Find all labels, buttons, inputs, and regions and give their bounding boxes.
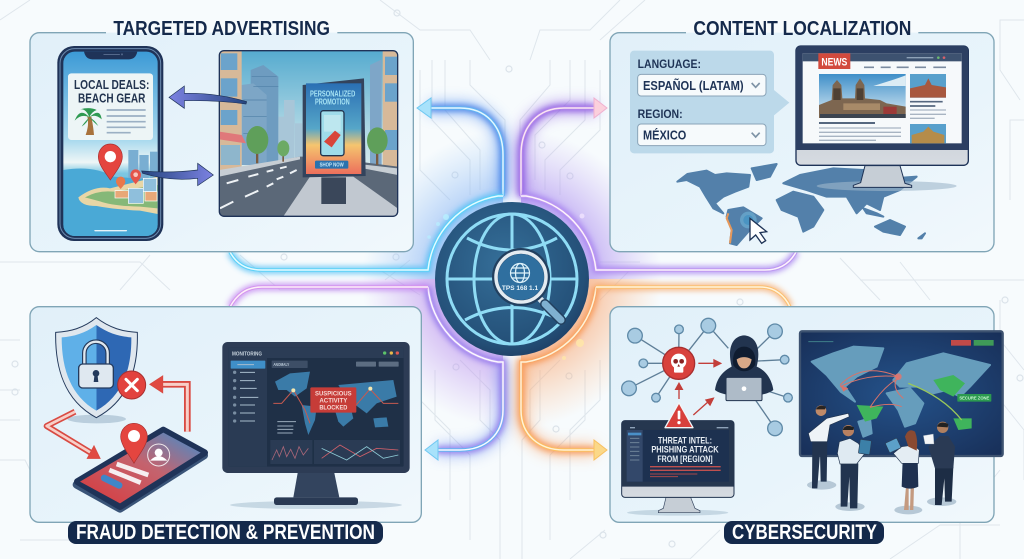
quadrant glow: lower left	[228, 279, 503, 500]
red arrow: phone to shield	[150, 376, 187, 432]
alert box	[310, 387, 356, 413]
quadrant glow: upper left	[228, 60, 503, 279]
heading: TARGETED ADVERTISING	[113, 17, 330, 40]
city on map	[128, 150, 158, 182]
tilted phone	[77, 423, 205, 509]
panel: targeted advertising	[30, 17, 413, 252]
arrow: center to fraud detection (purple to blue)	[230, 287, 503, 460]
billboard	[303, 78, 366, 177]
monitoring dashboard monitor: MONITORING	[232, 351, 262, 357]
blocked icon	[118, 371, 146, 399]
palm	[75, 108, 102, 135]
news photo cathedral	[819, 74, 906, 118]
central globe with magnifier	[427, 202, 589, 360]
ad text: LOCAL DEALS:	[74, 78, 149, 92]
label: fraud detection and prevention: FRAUD DETECTION & PREVENTION	[76, 521, 375, 544]
hacker with laptop	[715, 335, 773, 401]
arrow: phone to billboard	[142, 163, 213, 186]
analyst pointing at map	[807, 405, 849, 490]
threat intel monitor: PHISHING ATTACK	[651, 445, 719, 455]
map pins	[98, 144, 141, 189]
red threat arrows	[676, 360, 721, 415]
wall threat map	[800, 331, 1003, 456]
panel: fraud detection and prevention	[30, 307, 421, 522]
language and region selector: LANGUAGE:	[638, 57, 701, 71]
monitoring dashboard monitor: ANOMALY	[273, 362, 289, 367]
magnifier: TPS 168 1.1	[502, 285, 538, 292]
phone	[57, 46, 163, 241]
alert box: BLOCKED	[319, 404, 347, 411]
arrow: billboard to phone	[169, 86, 247, 108]
arrow: center to content localization (purple)	[521, 98, 796, 270]
billboard: SHOP NOW	[320, 163, 344, 169]
quadrant glow: lower right	[521, 279, 796, 500]
heading: CONTENT LOCALIZATION	[693, 17, 911, 40]
dashboard map	[275, 372, 397, 435]
language and region selector: REGION:	[638, 107, 683, 121]
skull node	[663, 347, 695, 379]
quadrant glow: upper right	[521, 60, 796, 279]
analyst in skirt	[885, 430, 922, 514]
street scene with billboard	[219, 51, 398, 216]
analyst in dark suit	[923, 422, 956, 506]
language and region selector: ESPAÑOL (LATAM)	[643, 78, 744, 93]
magnifier	[495, 251, 561, 320]
wall threat map: SECURE ZONE	[959, 396, 990, 402]
monitor with news page: NEWS	[821, 57, 847, 69]
label: cybersecurity: CYBERSECURITY	[732, 521, 877, 544]
alert box: ACTIVITY	[319, 397, 348, 404]
language and region selector: MÉXICO	[643, 127, 686, 142]
phone: BEACH GEAR	[78, 91, 145, 105]
glow sparks	[427, 214, 584, 360]
warning triangle	[665, 403, 693, 428]
shield with lock	[56, 318, 137, 423]
threat intel monitor	[622, 421, 734, 516]
threat intel monitor: THREAT INTEL:	[658, 435, 712, 445]
analyst with tablet	[835, 425, 872, 511]
globe grid	[447, 214, 577, 344]
world map	[677, 164, 925, 245]
arrow: center to targeted advertising (blue)	[230, 98, 503, 270]
red arrow: shield to phone	[47, 412, 100, 458]
monitor with news page	[796, 46, 968, 191]
panel: cybersecurity	[610, 307, 1003, 522]
cursor on South America	[740, 212, 767, 243]
monitoring dashboard monitor	[222, 342, 410, 509]
language and region selector	[630, 51, 789, 153]
billboard: PROMOTION	[315, 96, 350, 106]
threat intel monitor: FROM [REGION]	[657, 454, 713, 464]
alert box: SUSPICIOUS	[315, 390, 352, 397]
arrow: center to cybersecurity (orange)	[521, 287, 790, 460]
billboard: PERSONALIZED	[310, 89, 355, 99]
threat network nodes	[622, 318, 792, 436]
panel: content localization	[610, 17, 994, 252]
